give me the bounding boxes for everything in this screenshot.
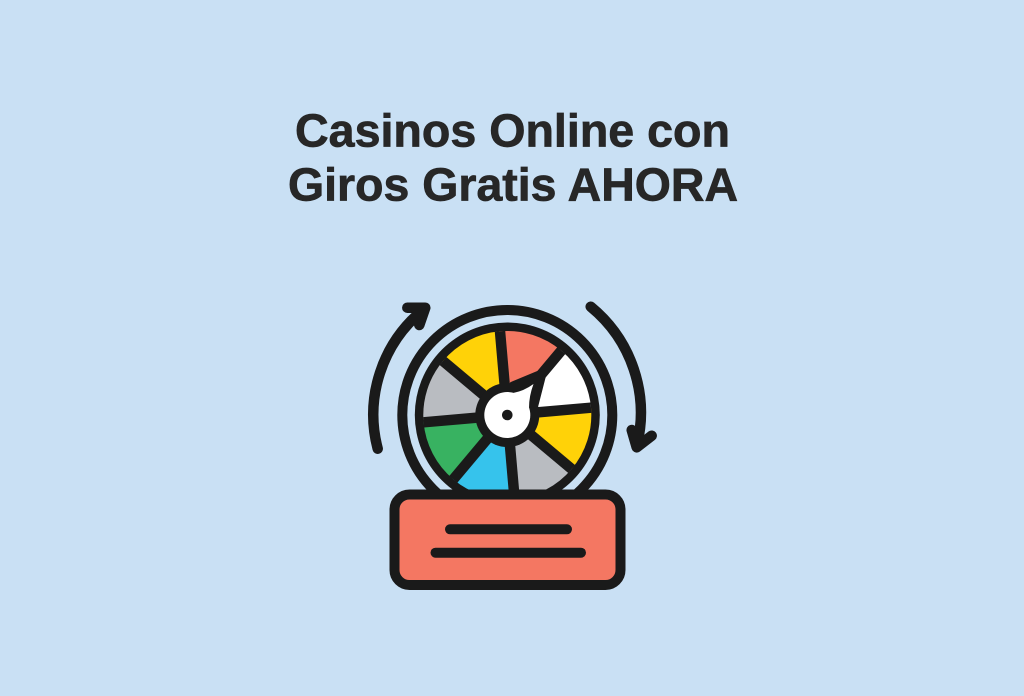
sector: white	[507, 351, 591, 415]
sector: green	[424, 415, 507, 479]
base panel	[394, 494, 620, 585]
wheel face	[415, 322, 600, 508]
sector: gray left	[423, 361, 507, 422]
icon: prize wheel	[373, 307, 652, 585]
sector: yellow top	[443, 331, 507, 415]
base text lines	[436, 529, 581, 553]
title: Giros Gratis AHORA	[288, 159, 738, 211]
sector: gray bottom	[507, 415, 572, 499]
wheel outer ring	[402, 310, 612, 520]
wheel spokes	[424, 331, 591, 499]
arrow: left rotation	[373, 308, 425, 449]
sector: yellow right	[507, 408, 591, 469]
sector: blue	[453, 415, 515, 499]
wheel hub and pointer	[475, 368, 547, 447]
title	[288, 105, 738, 211]
arrow: right rotation	[591, 307, 652, 447]
sector: coral	[500, 331, 561, 415]
title: Casinos Online con	[295, 105, 730, 157]
